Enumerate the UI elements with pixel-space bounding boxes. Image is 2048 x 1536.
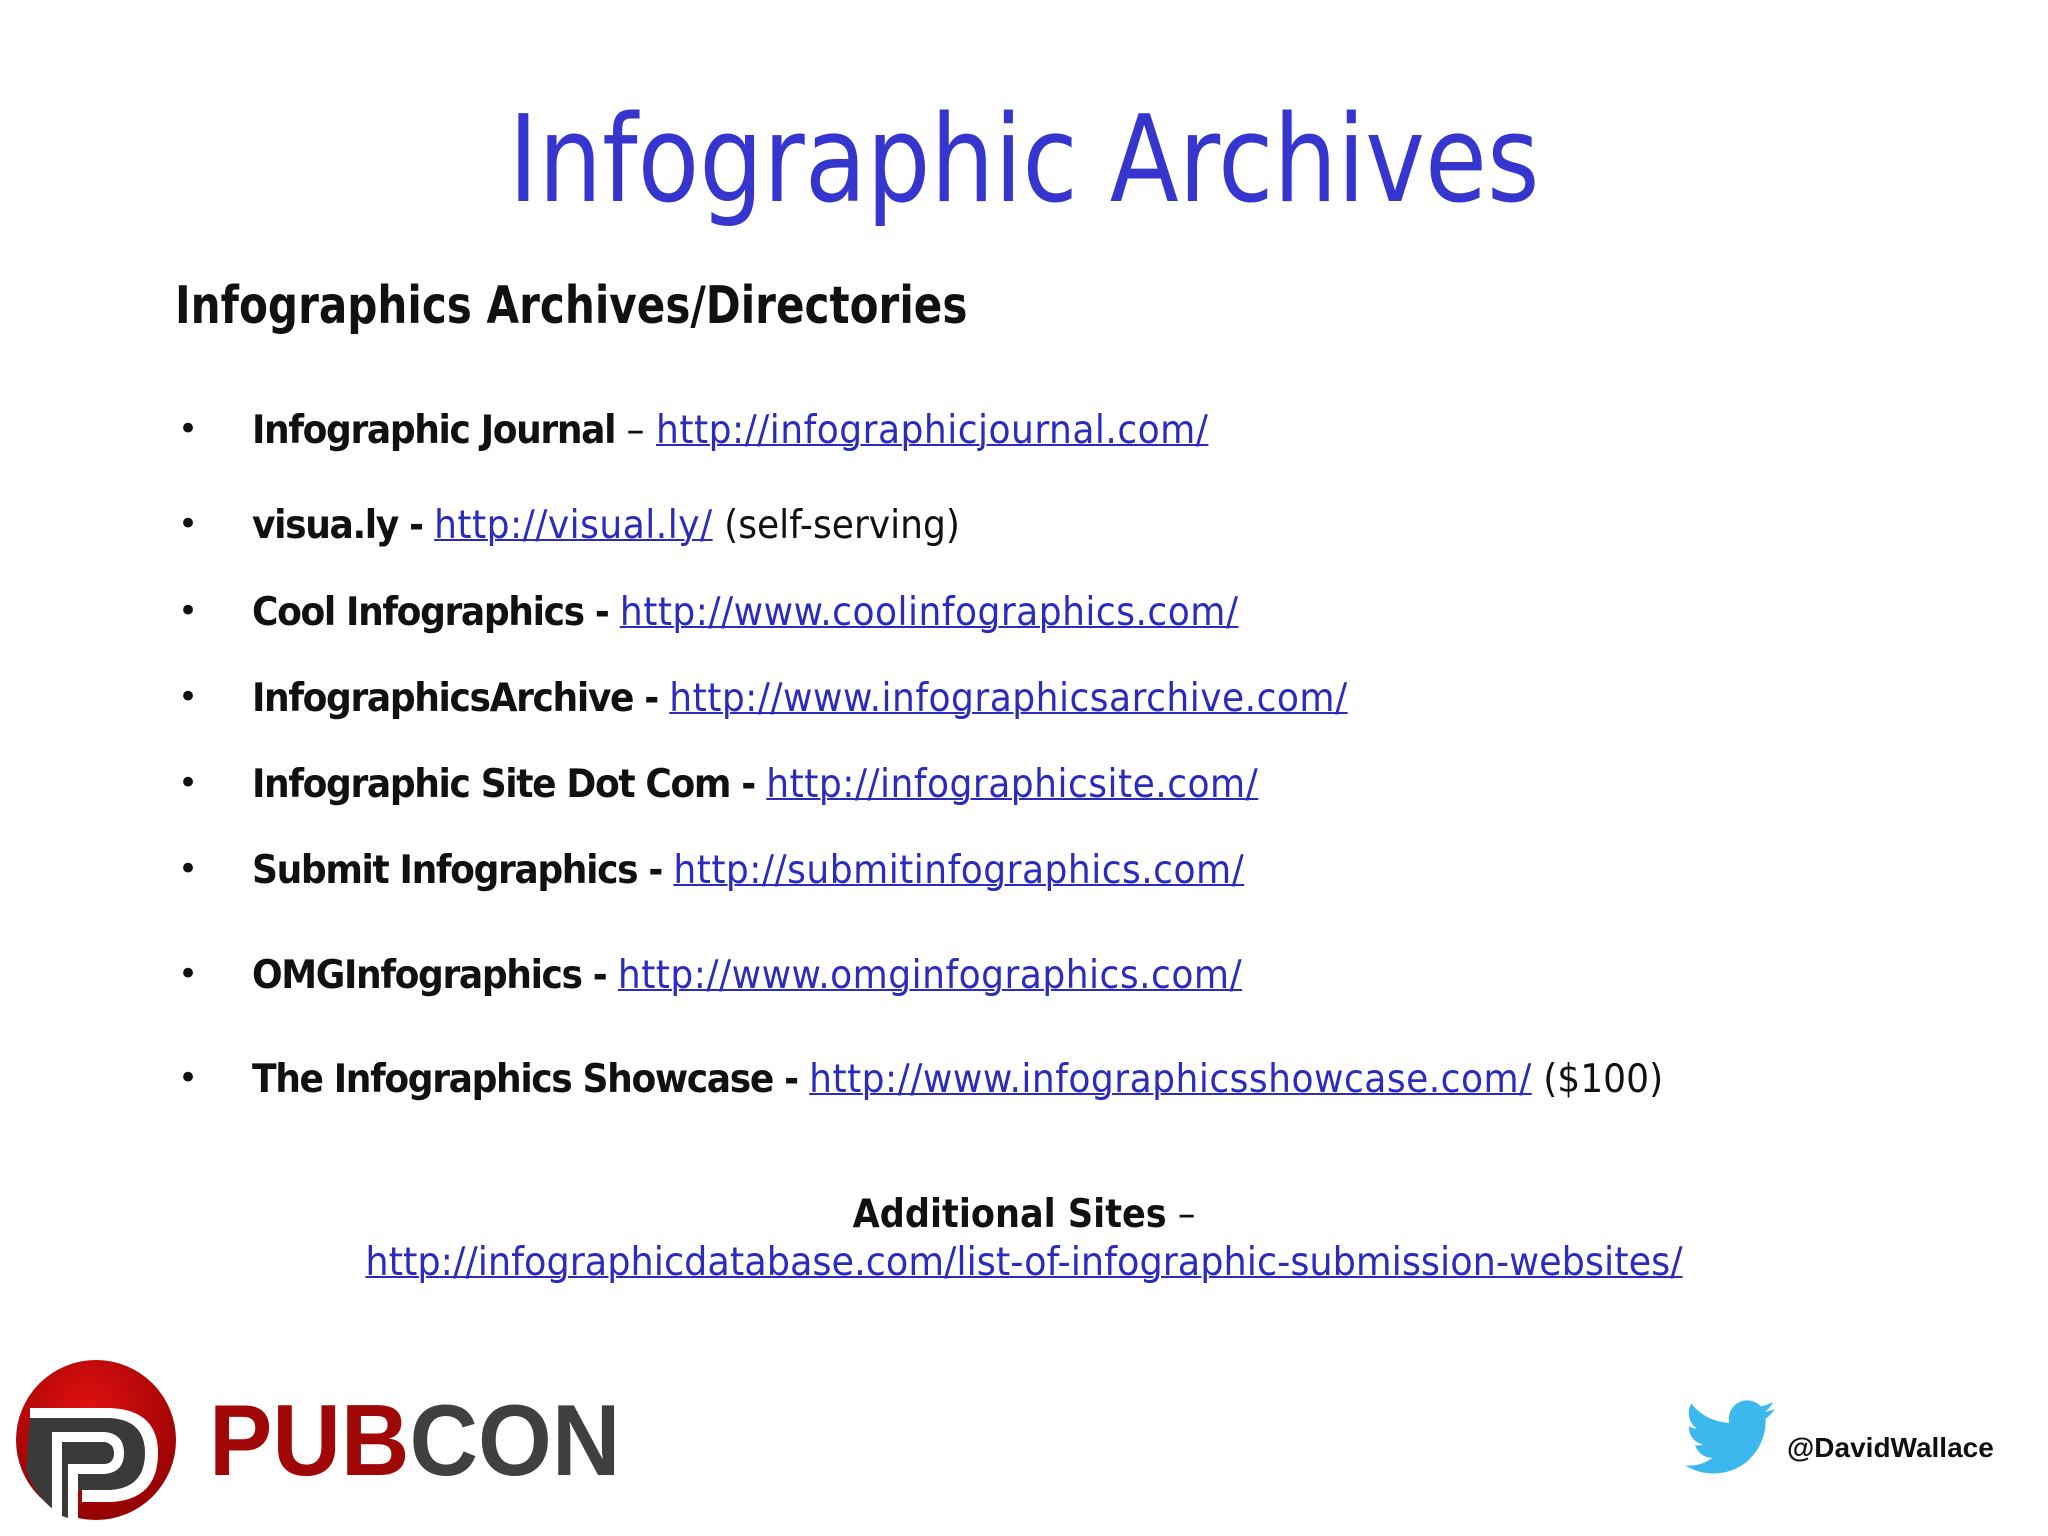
additional sites: Additional Sites – <box>853 1192 1195 1237</box>
item 2: visua.ly - http://visual.ly/ (self-serving) <box>252 503 960 548</box>
item 7: • <box>178 954 198 994</box>
subheading: Infographics Archives/Directories <box>175 276 967 336</box>
item 6: Submit Infographics - http://submitinfographics.com/ <box>252 848 1244 893</box>
item 8: The Infographics Showcase - http://www.infographicsshowcase.com/ ($100) <box>252 1057 1663 1102</box>
item 2: • <box>178 504 198 544</box>
item 7: OMGInfographics - http://www.omginfographics.com/ <box>252 953 1242 998</box>
icon: pubcon P <box>16 1360 176 1522</box>
icon: twitter bird <box>1685 1400 1775 1474</box>
logo: pubcon <box>16 1360 620 1522</box>
handle text: @DavidWallace <box>1787 1432 1994 1463</box>
item 1: • <box>178 409 198 449</box>
item 5: Infographic Site Dot Com - http://infographicsite.com/ <box>252 762 1258 807</box>
item 8: • <box>178 1058 198 1098</box>
logo text: PUBCON <box>209 1385 620 1497</box>
item 3: Cool Infographics - http://www.coolinfographics.com/ <box>252 590 1238 635</box>
item 5: • <box>178 763 198 803</box>
additional sites: http://infographicdatabase.com/list-of-infographic-submission-websites/ <box>365 1240 1683 1285</box>
item 4: • <box>178 677 198 717</box>
bullet list <box>178 408 1663 1102</box>
item 6: • <box>178 849 198 889</box>
item 1: Infographic Journal – http://infographicjournal.com/ <box>252 408 1208 453</box>
title: Infographic Archives <box>509 91 1539 230</box>
item 3: • <box>178 591 198 631</box>
twitter handle <box>1685 1400 1994 1474</box>
item 4: InfographicsArchive - http://www.infographicsarchive.com/ <box>252 676 1348 721</box>
additional sites <box>365 1192 1683 1285</box>
